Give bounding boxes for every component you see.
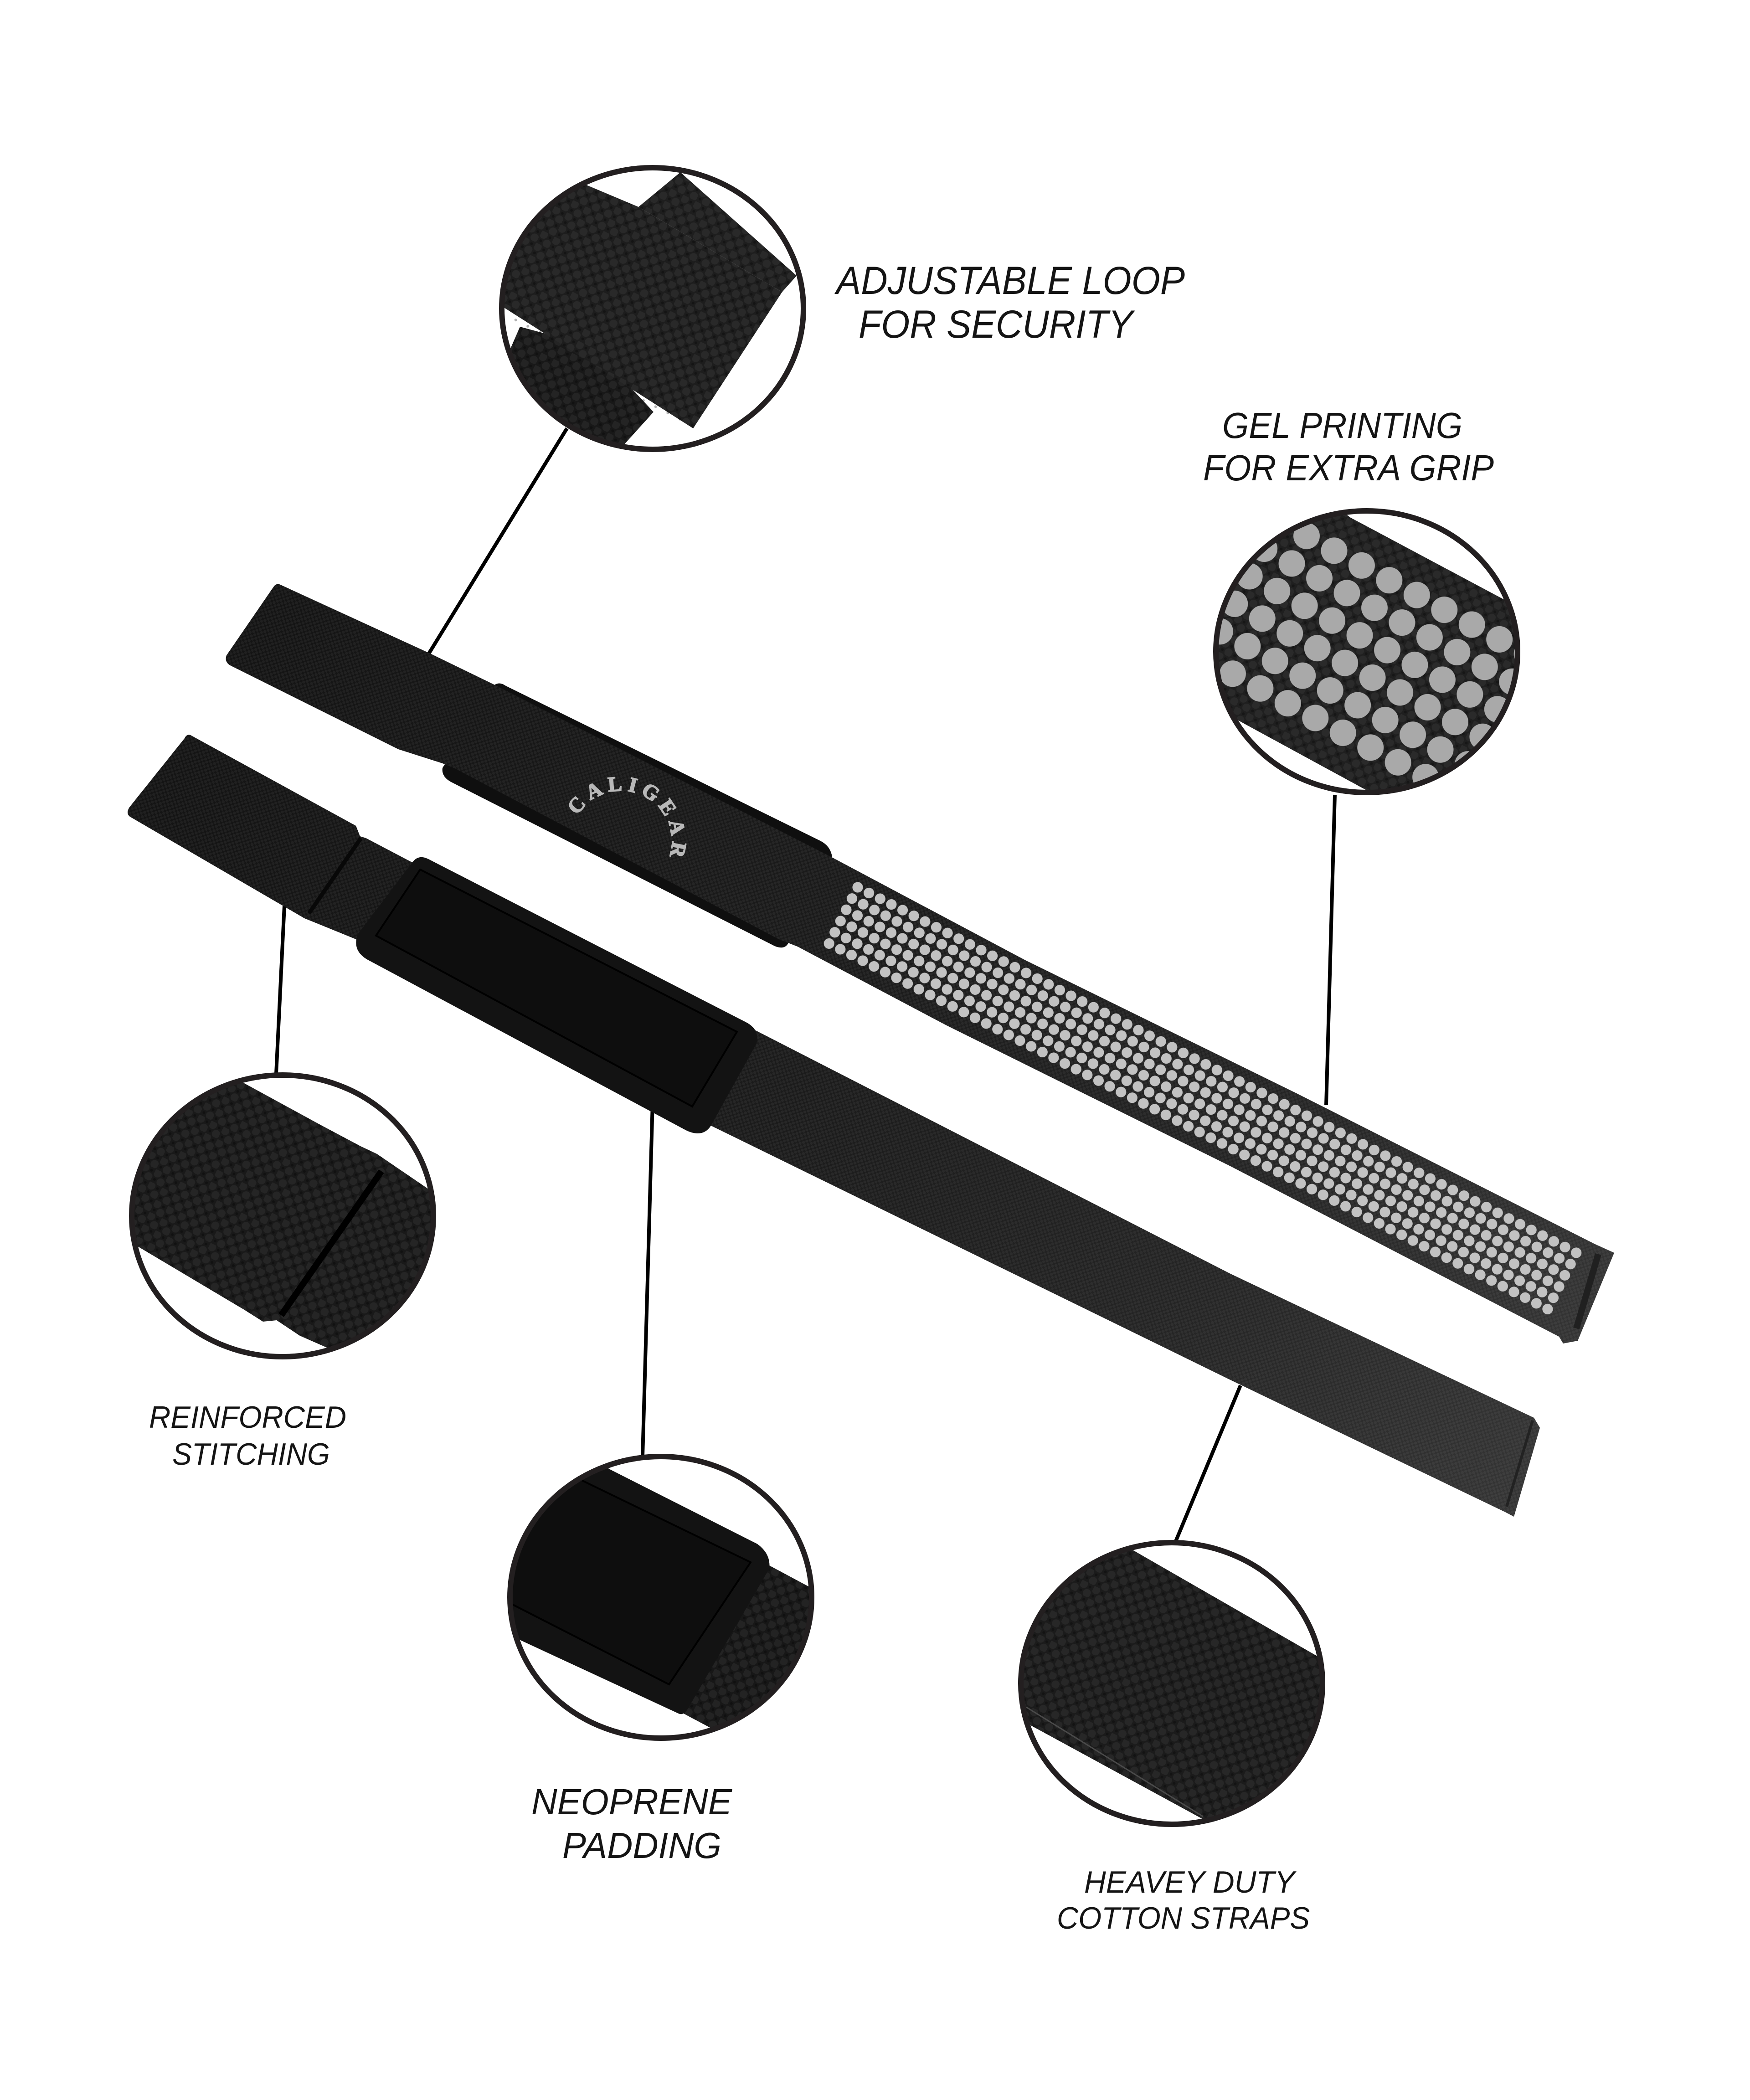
magnified detail: stitching <box>129 1072 436 1359</box>
callout: heavy duty cotton straps <box>1018 1540 1325 1929</box>
product: upper strap with gel grip: CALIGEAR <box>563 772 691 864</box>
callout: reinforced stitching <box>129 1072 436 1465</box>
label: gel printing: GEL PRINTING <box>1222 405 1462 446</box>
brand mark <box>577 791 672 860</box>
neoprene pad inner panel <box>376 870 737 1107</box>
upper strap fabric <box>226 584 1614 1343</box>
magnified detail: gel dots <box>1213 508 1520 795</box>
label: gel printing: FOR EXTRA GRIP <box>1203 448 1494 488</box>
callout: adjustable loop <box>456 168 1185 449</box>
magnified detail: loop <box>456 168 803 449</box>
label: heavy duty cotton straps: COTTON STRAPS <box>1057 1901 1310 1935</box>
lower strap fabric <box>128 735 1540 1517</box>
label: adjustable loop: FOR SECURITY <box>859 303 1135 346</box>
gel grip dots <box>821 879 1585 1318</box>
label: neoprene padding: NEOPRENE <box>531 1781 733 1822</box>
lower strap seam <box>309 838 361 913</box>
callout: gel printing <box>1204 412 1520 795</box>
product: upper strap with gel grip <box>226 584 1614 1343</box>
label: reinforced stitching: STITCHING <box>172 1437 330 1472</box>
lower strap end stitching <box>1507 1421 1533 1507</box>
callout: neoprene padding <box>507 1454 814 1858</box>
product: lower strap with neoprene pad <box>128 735 1540 1517</box>
label: reinforced stitching: REINFORCED <box>149 1400 346 1435</box>
neoprene pad <box>356 857 757 1133</box>
label: heavy duty cotton straps: HEAVEY DUTY <box>1084 1865 1297 1899</box>
upper strap end stitching <box>1576 1254 1598 1328</box>
magnified detail: neoprene pad <box>479 1457 820 1738</box>
upper strap padding <box>443 683 832 947</box>
label: adjustable loop: ADJUSTABLE LOOP <box>834 259 1185 303</box>
label: neoprene padding: PADDING <box>562 1825 721 1866</box>
leader lines <box>276 428 1335 1542</box>
magnified detail: cotton weave <box>1018 1540 1325 1827</box>
